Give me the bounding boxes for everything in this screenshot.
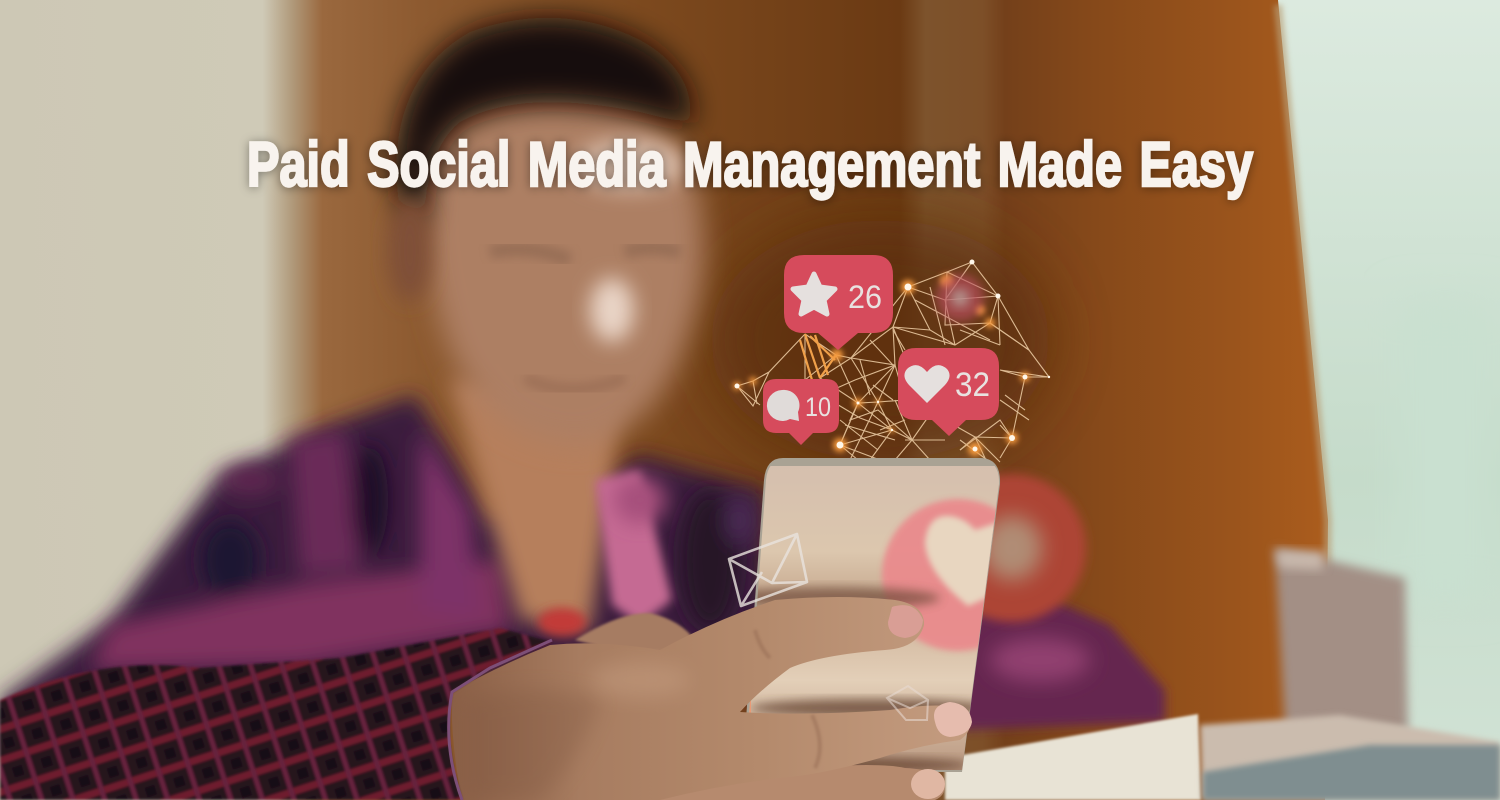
smartphone bbox=[746, 458, 1000, 772]
face bbox=[424, 100, 704, 445]
blurred red heart circle behind phone bbox=[938, 474, 1086, 622]
blurred mug bbox=[1275, 548, 1408, 732]
blurred person: head and torso bbox=[0, 18, 1165, 760]
collar bbox=[595, 470, 672, 625]
notification bubble: star 26 bbox=[784, 255, 893, 350]
shirt torso bbox=[0, 395, 770, 760]
glow nodes bbox=[733, 274, 1030, 456]
finger shadows bbox=[720, 587, 940, 609]
red undershirt bbox=[538, 608, 586, 636]
hand shading bbox=[465, 690, 600, 800]
network of glowing lines bbox=[733, 260, 1050, 462]
thumb base bbox=[575, 613, 695, 660]
notification bubble: heart 32: 32 bbox=[955, 366, 990, 404]
nose highlight bbox=[590, 278, 634, 342]
notification bubble: heart 32 bbox=[898, 348, 999, 436]
hand holding phone bbox=[452, 597, 972, 800]
mouth bbox=[525, 378, 625, 389]
notification bubble: comment 10 bbox=[763, 379, 839, 445]
laptop corner bbox=[1200, 715, 1500, 800]
ring finger bbox=[620, 765, 945, 800]
palm and index finger bbox=[452, 597, 970, 800]
shirt right of phone bbox=[960, 590, 1165, 730]
icon: star bbox=[793, 274, 835, 314]
shirt plaid patches bbox=[90, 430, 754, 670]
hair bbox=[396, 18, 692, 225]
eye shadows bbox=[490, 248, 680, 260]
icon: heart bbox=[904, 365, 950, 403]
notification bubble: star 26: 26 bbox=[848, 279, 882, 315]
icon: envelope large bbox=[729, 534, 807, 606]
knuckle creases bbox=[755, 630, 820, 768]
icon: speech bubble bbox=[767, 390, 799, 421]
neck and chest bbox=[450, 380, 620, 630]
nail: middle bbox=[934, 702, 972, 737]
pink heart overlay bbox=[880, 496, 996, 654]
icon: envelope small on fingers bbox=[887, 686, 928, 720]
forehead highlight bbox=[575, 139, 685, 191]
notebook on table bbox=[945, 714, 1201, 800]
shirt sleeve cuff bbox=[0, 628, 552, 800]
ear bbox=[388, 198, 432, 302]
notification bubble: comment 10: 10 bbox=[805, 392, 831, 422]
nail: index bbox=[888, 605, 923, 638]
pink glow in network bbox=[936, 274, 984, 322]
